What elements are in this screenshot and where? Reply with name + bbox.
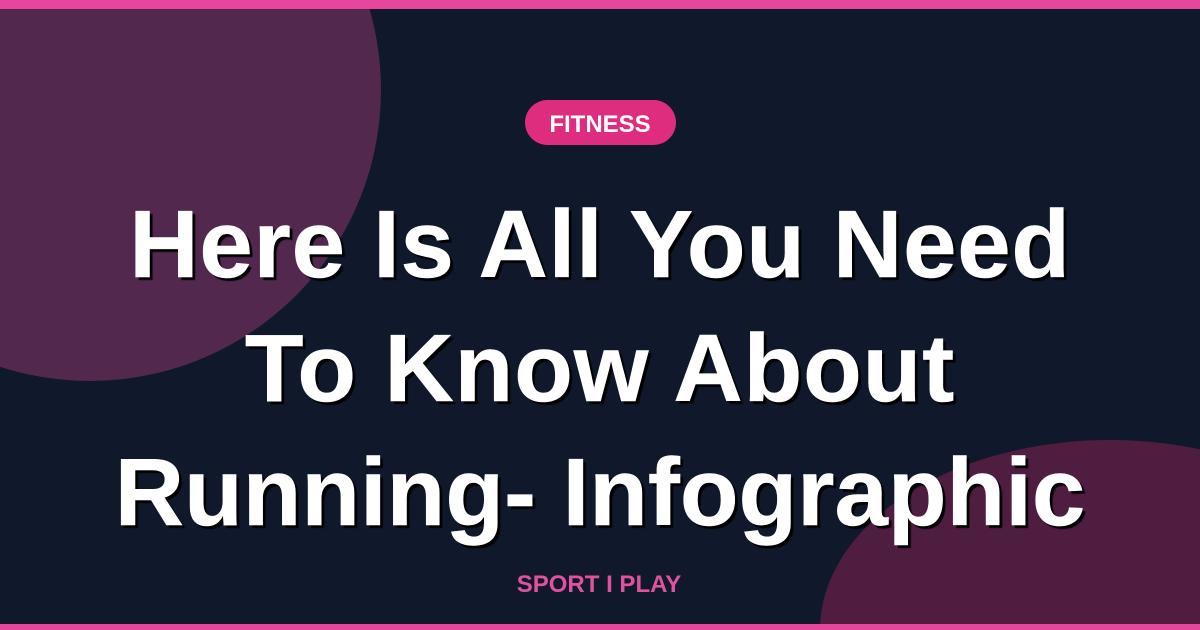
- decorative circle: top left: [0, 9, 381, 381]
- bottom pink bar: [0, 624, 1200, 630]
- title: [115, 191, 1086, 549]
- category badge: FITNESS: [525, 100, 676, 145]
- top pink bar: [0, 0, 1200, 9]
- title: To Know About: [245, 315, 955, 422]
- title: Running- Infographic: [115, 439, 1085, 546]
- brand: SPORT I PLAY: SPORT I PLAY: [517, 571, 681, 598]
- decorative circle: bottom right: [820, 440, 1200, 624]
- category badge: FITNESS: FITNESS: [549, 111, 651, 138]
- title: Here Is All You Need: [129, 191, 1071, 298]
